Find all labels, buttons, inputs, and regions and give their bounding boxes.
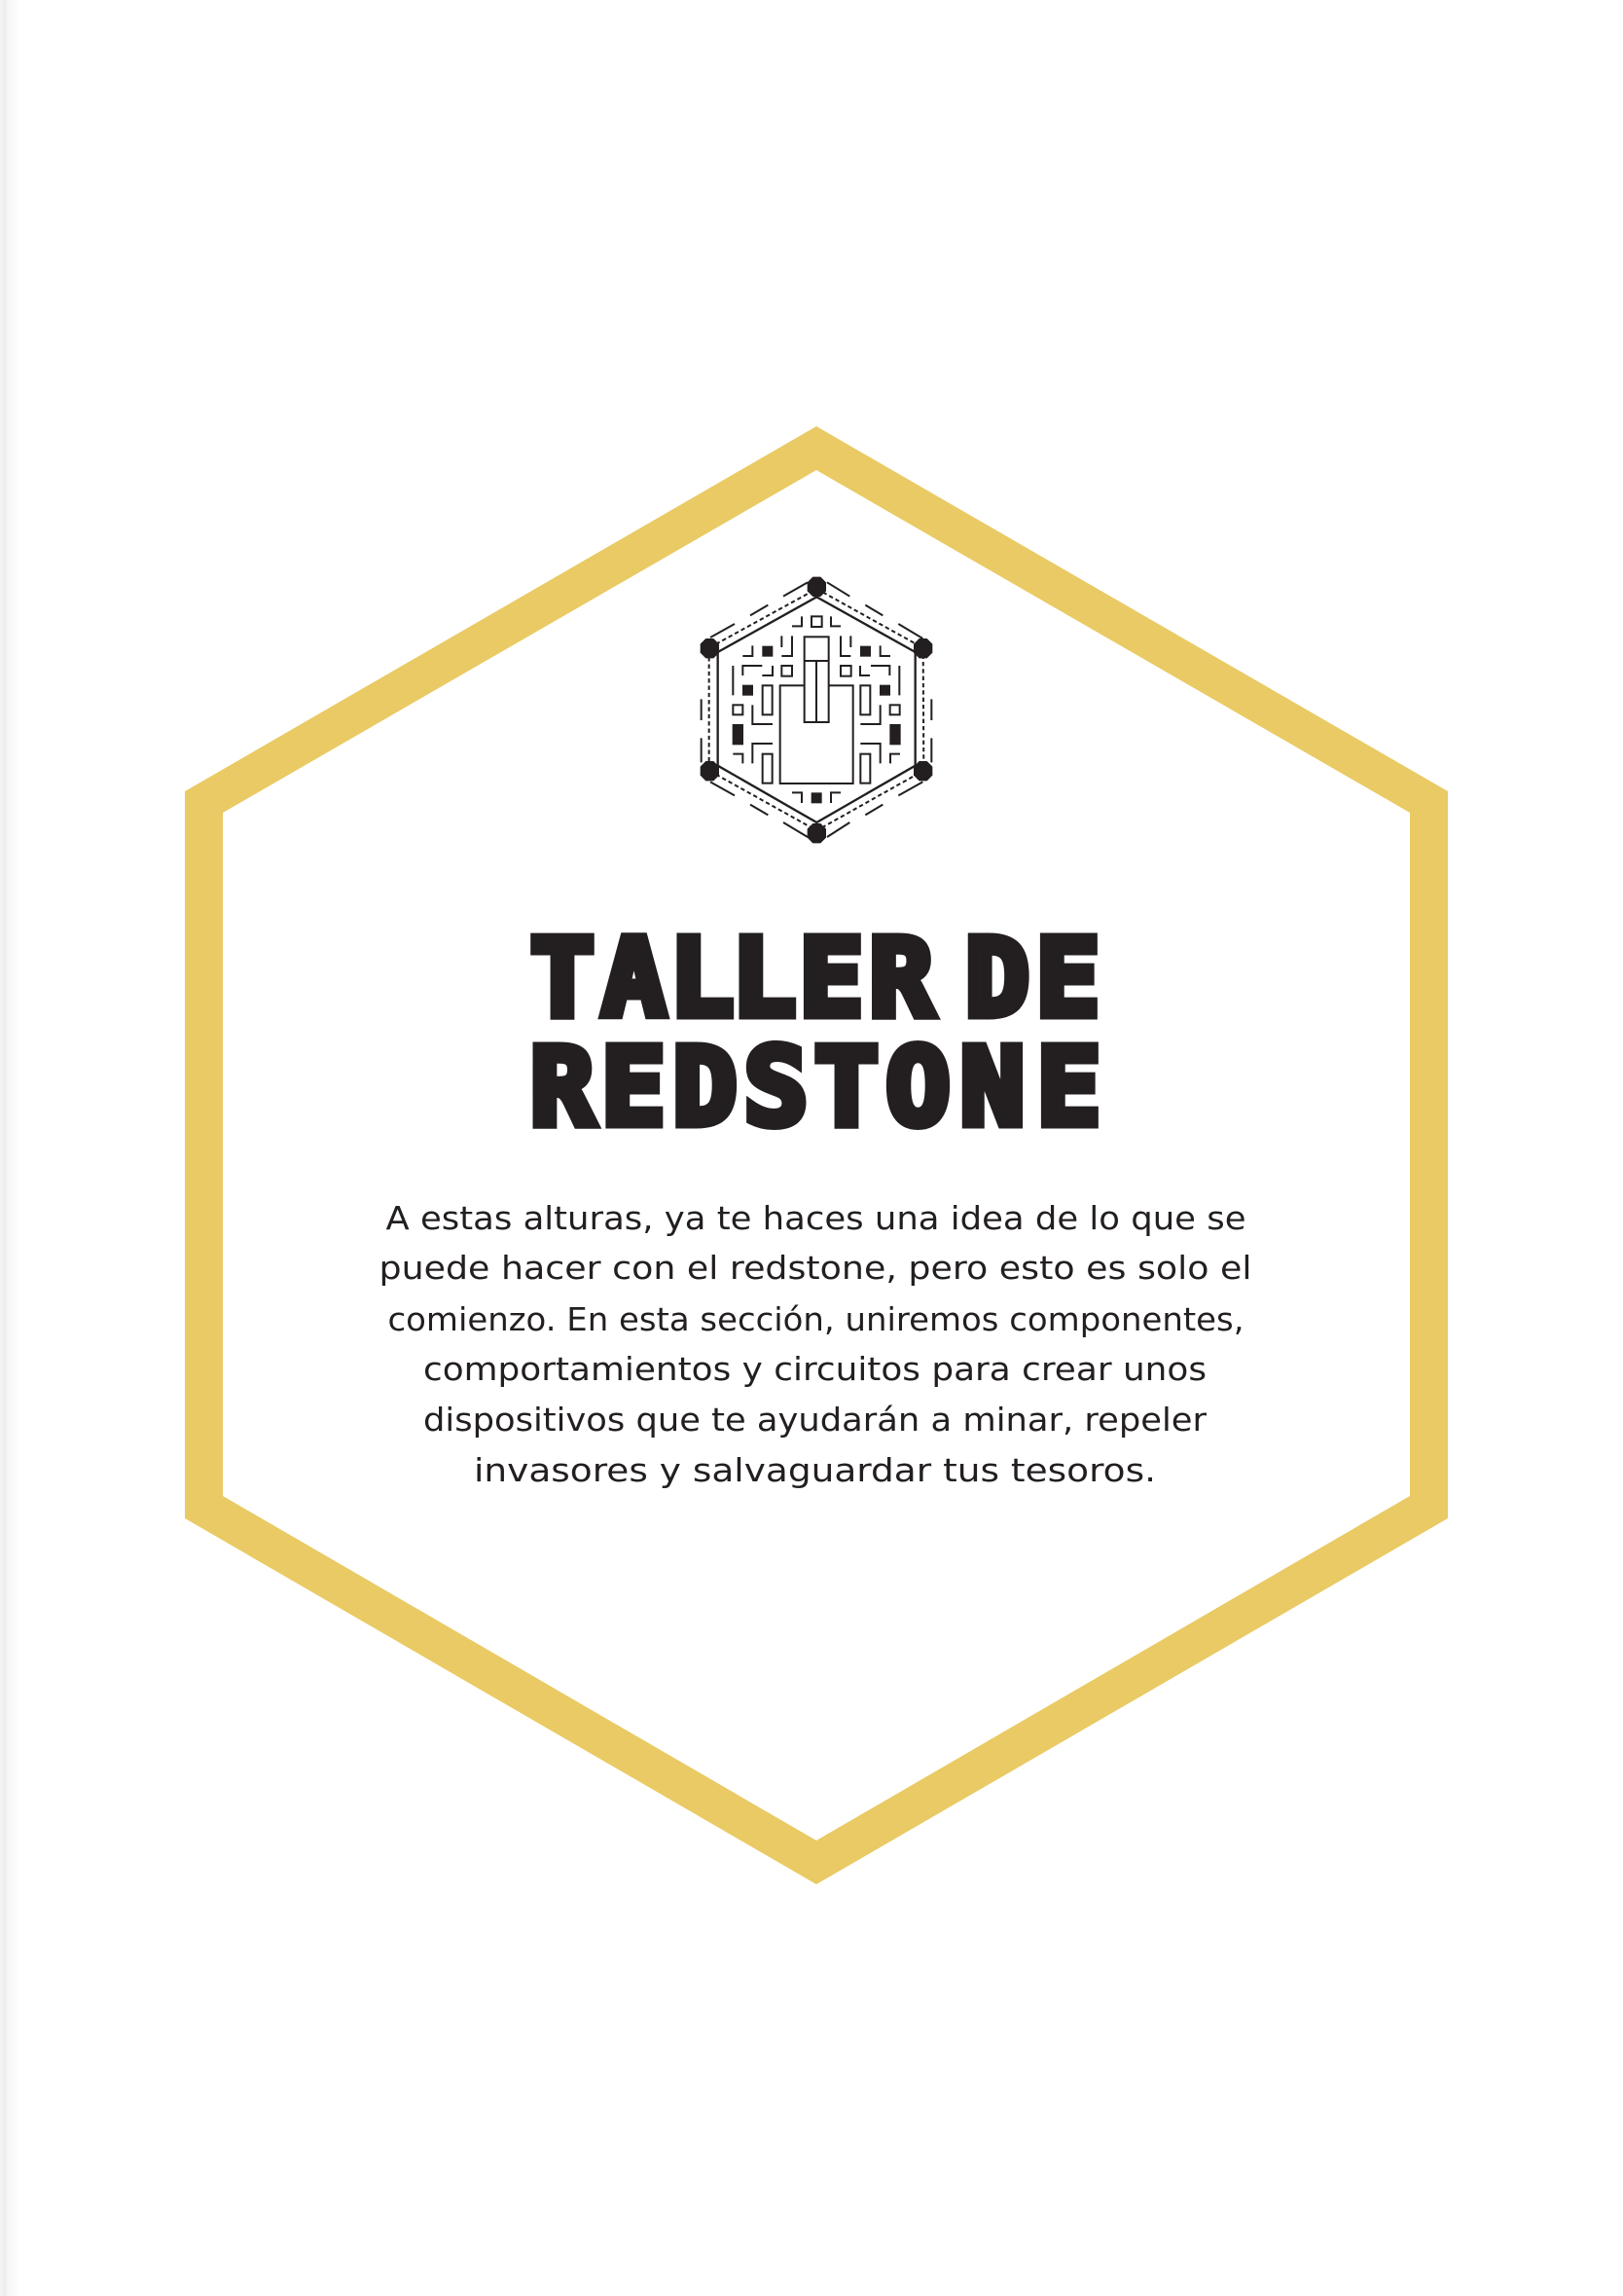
yellow hexagon frame — [185, 426, 1448, 1884]
body line 1: A estas alturas, ya te haces una idea de lo que se — [385, 1199, 1245, 1237]
icon: filled squares — [733, 646, 901, 803]
body text — [379, 1199, 1251, 1489]
body line 3: comienzo. En esta sección, uniremos componentes, — [387, 1300, 1244, 1338]
body line 4: comportamientos y circuitos para crear unos — [423, 1350, 1207, 1388]
title line 1: TALLER DE — [530, 916, 1100, 1040]
icon: outlined squares and bars — [733, 616, 900, 784]
icon: outer dash segments — [702, 582, 931, 837]
icon: hexagon outline — [718, 597, 916, 822]
icon: circuit traces — [733, 616, 900, 803]
icon: redstone hexagon emblem — [701, 577, 932, 843]
icon: corner nodes — [701, 577, 932, 843]
body line 6: invasores y salvaguardar tus tesoros. — [474, 1451, 1156, 1489]
icon: dashed hexagon ring — [709, 589, 923, 830]
title line 2: REDSTONE — [530, 1025, 1101, 1149]
body line 5: dispositivos que te ayudarán a minar, repeler — [423, 1401, 1207, 1439]
body line 2: puede hacer con el redstone, pero esto es solo el — [379, 1249, 1251, 1287]
title — [530, 916, 1101, 1149]
icon: central piston block — [780, 637, 853, 784]
